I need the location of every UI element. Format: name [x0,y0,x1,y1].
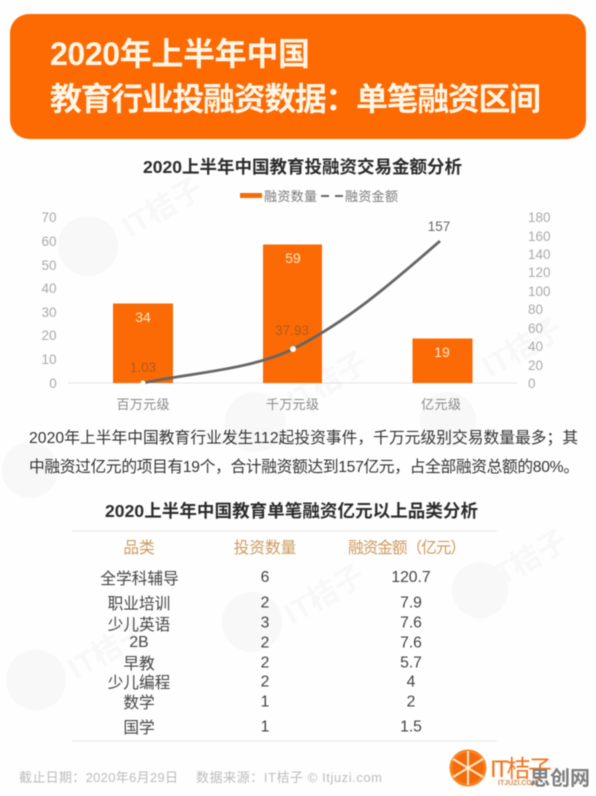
category column: 2B [129,634,149,651]
chart title: 2020上半年中国教育投融资交易金额分析 [143,157,462,177]
left axis labels: 10 [41,352,57,367]
amount column: 7.6 [400,614,422,632]
category column: 早教 [123,655,155,673]
line value labels [130,219,450,375]
left axis labels: 30 [41,305,57,320]
left axis labels [41,210,57,391]
line value labels: 157 [428,219,450,234]
chart legend: 融资金额 [345,189,398,204]
bar value labels: 59 [285,250,301,266]
right axis labels: 120 [528,265,551,280]
right axis labels: 100 [528,284,551,299]
bar value labels: 34 [135,309,151,325]
axis line [68,382,517,384]
amount column: 7.6 [400,634,422,652]
bar: 亿元级 [412,338,472,383]
table header [123,539,466,557]
deal count column: 2 [261,674,269,690]
banner title: 教育行业投融资数据：单笔融资区间 [50,81,541,117]
table header: 融资金额（亿元） [348,539,466,557]
footer source note [19,770,382,785]
right axis labels: 180 [528,210,551,225]
footer source note: 截止日期：2020年6月29日 [19,770,178,785]
summary paragraph: 中融资过亿元的项目有19个，合计融资额达到157亿元，占全部融资总额的80%。 [29,458,579,476]
table title: 2020上半年中国教育单笔融资亿元以上品类分析 [105,501,478,521]
category labels: 千万元级 [266,397,319,412]
deal count column: 2 [261,654,269,672]
right axis labels: 140 [528,247,551,262]
deal count column: 2 [261,594,269,612]
header banner [10,14,586,139]
line value labels: 1.03 [130,360,156,375]
left axis labels: 40 [41,281,57,296]
table header: 品类 [123,539,155,557]
logo: IT桔子 [450,750,552,787]
deal count column: 1 [261,694,269,710]
right axis labels: 60 [528,321,543,336]
line value labels: 37.93 [275,323,309,338]
site watermark: 思创网 [530,767,590,790]
chart legend: 融资数量 [264,189,317,204]
bar: 千万元级 [263,244,322,383]
combo chart: financing count bars and amount line [41,210,551,412]
amount column: 7.9 [400,594,422,612]
amount line [143,241,440,383]
bar value labels [135,250,450,360]
left axis labels: 50 [41,258,57,273]
right axis labels: 80 [528,302,543,317]
category labels: 百万元级 [116,397,170,412]
watermarks: IT桔子 [63,614,155,686]
watermarks: IT桔子 [282,346,374,418]
deal count column [261,569,270,736]
right axis labels: 160 [528,229,551,244]
watermarks: IT桔子 [279,559,371,631]
summary paragraph: 2020年上半年中国教育行业发生112起投资事件，千万元级别交易数量最多；其 [29,429,578,447]
amount column [391,569,431,736]
category column: 职业培训 [108,595,170,613]
right axis labels: 20 [528,358,543,373]
chart legend [240,189,398,204]
table header: 投资数量 [234,539,296,557]
category column: 国学 [123,719,155,737]
amount column: 2 [407,694,415,710]
banner title [50,36,541,117]
category column: 数学 [123,694,155,712]
deal count column: 1 [261,718,269,736]
category column [100,570,179,737]
deal count column: 2 [261,634,269,652]
category column: 少儿编程 [108,674,171,692]
line markers [140,340,296,386]
category column: 少儿英语 [108,616,171,634]
amount column: 5.7 [400,654,422,672]
logo: IT桔子: ITJUZI.COM [498,780,538,787]
category column: 全学科辅导 [100,570,179,588]
summary paragraph [29,429,579,476]
icon: orange slice [450,750,486,786]
logo: IT桔子: IT桔子 [490,756,552,783]
watermarks: IT桔子 [117,172,209,244]
left axis labels: 60 [41,234,57,249]
footer source note: 数据来源：IT桔子 © Itjuzi.com [196,770,382,785]
left axis labels: 20 [41,328,57,343]
category labels: 亿元级 [421,397,461,412]
amount column: 120.7 [391,569,431,586]
amount column: 4 [407,674,416,690]
left axis labels: 70 [41,210,57,225]
deal count column: 3 [261,614,270,632]
right axis labels [528,210,551,391]
amount column: 1.5 [400,718,422,736]
category labels [116,397,461,412]
left axis labels: 0 [49,376,57,391]
watermarks [2,172,574,710]
deal count column: 6 [261,569,270,586]
banner title: 2020年上半年中国 [50,36,310,72]
bar: 百万元级 [113,304,173,383]
watermarks: IT桔子 [477,312,569,384]
table: category analysis [72,531,497,741]
right axis labels: 40 [528,339,543,354]
bar value labels: 19 [434,344,450,360]
right axis labels: 0 [528,376,536,391]
watermarks: IT桔子 [482,524,574,596]
